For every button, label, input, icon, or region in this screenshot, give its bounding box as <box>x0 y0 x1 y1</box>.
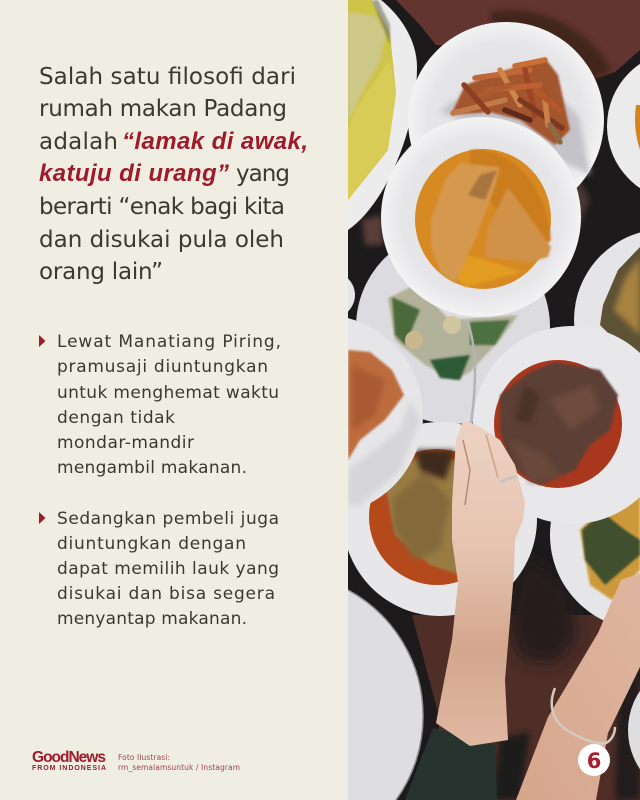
bullet point two: Sedangkan pembeli juga <box>57 509 279 529</box>
heading text: “lamak di awak, <box>122 128 308 155</box>
bullet marker <box>39 512 46 524</box>
bullet point one: untuk menghemat waktu <box>57 383 279 403</box>
ring <box>500 476 516 482</box>
plate: yellow curry <box>348 0 417 230</box>
photo credit <box>118 753 240 772</box>
second arm with bracelet <box>516 573 640 800</box>
bullet point one: dengan tidak <box>57 408 175 428</box>
bracelet <box>552 688 615 744</box>
plate: sliver left <box>348 278 355 312</box>
bullet point one: Lewat Manatiang Piring, <box>57 332 281 352</box>
heading text: dan disukai pula oleh <box>39 227 284 253</box>
heading text: berarti “enak bagi kita <box>39 194 285 220</box>
logo: GoodNews from Indonesia: FROM INDONESIA <box>32 765 106 772</box>
wooden table top <box>396 0 640 82</box>
bullet point two <box>39 509 279 629</box>
page number badge: 6 <box>587 749 601 773</box>
logo: GoodNews from Indonesia: GoodNews <box>32 749 106 766</box>
bullet point one <box>39 332 281 478</box>
photo credit: Foto Ilustrasi: <box>118 753 170 762</box>
plate: fried balado <box>408 22 604 188</box>
heading text: Salah satu filosofi dari <box>39 64 296 90</box>
photo credit: rm_semalamsuntuk / Instagram <box>118 763 240 772</box>
arm and hand holding spoon <box>436 421 525 746</box>
page number badge <box>578 744 610 776</box>
plate: chicken curry <box>343 422 537 616</box>
plate: top right <box>607 64 640 188</box>
tripe pieces <box>431 163 551 283</box>
plate: rendang <box>473 326 640 524</box>
heading text <box>39 64 308 285</box>
bullet point two: dapat memilih lauk yang <box>57 559 279 579</box>
spoon <box>467 320 475 425</box>
photo: rumah makan Padang dishes on table <box>348 0 640 800</box>
plate: fried shredded food <box>348 318 424 506</box>
wooden table bottom <box>362 140 640 800</box>
bullet point one: pramusaji diuntungkan <box>57 357 268 377</box>
plate: greens and curry bottom right <box>550 497 640 620</box>
heading text: rumah makan Padang <box>39 96 287 122</box>
heading text: orang lain” <box>39 259 163 285</box>
left text panel <box>0 0 348 800</box>
plate: middle right with greens <box>574 232 640 353</box>
heading text: yang <box>236 161 290 187</box>
bullet point two: disukai dan bisa segera <box>57 584 275 604</box>
heading text: adalah <box>39 129 118 155</box>
plate: sliver bottom right <box>628 690 640 770</box>
plate: large empty bottom left <box>348 590 423 800</box>
dark sleeve <box>405 728 497 800</box>
bullet point two: menyantap makanan. <box>57 609 247 629</box>
bullet point one: mondar-mandir <box>57 433 194 453</box>
rendang meat <box>500 362 618 485</box>
plate: gulai <box>381 117 581 317</box>
bullet point one: mengambil makanan. <box>57 458 247 478</box>
bullet point two: diuntungkan dengan <box>57 534 246 554</box>
heading text: katuju di urang” <box>39 160 229 187</box>
bullet marker <box>39 335 46 347</box>
plate: vegetables <box>356 254 550 424</box>
